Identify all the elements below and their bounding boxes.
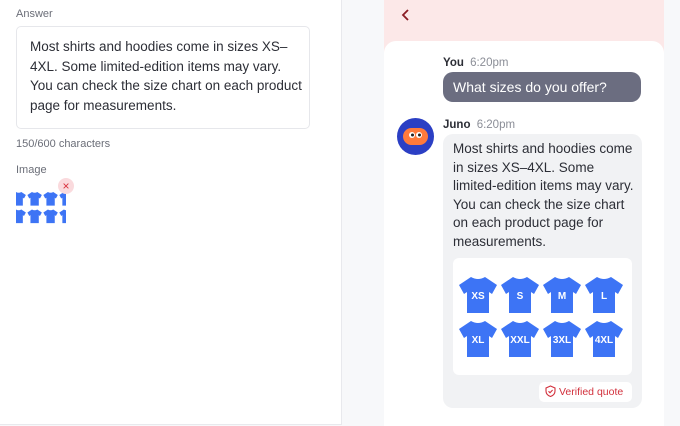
panel: answer editor [0,0,342,425]
text box: answer: Most shirts and hoodies come in sizes XS– [30,39,287,54]
text box: answer: You can check the size chart on each product [30,78,302,93]
bot message [443,119,642,408]
bot message: You can check the size chart [453,196,624,212]
size chart image: 4XL [595,335,613,346]
text box: answer: 4XL. Some limited-edition items may vary. [30,58,281,74]
user message [443,57,641,102]
panel: chat preview [384,0,664,426]
label: Answer: Answer [16,8,53,20]
bot message: measurements. [453,234,546,248]
character count: 150/600 characters [16,138,110,150]
label: Image: Image [16,164,47,176]
icon: Juno avatar [397,118,434,155]
user message: You 6:20pm [443,57,508,69]
size chart image: XS [471,291,485,302]
icon: back [402,9,409,21]
text box: answer [16,26,310,129]
size chart image: M [558,291,566,302]
size chart image: XL [472,335,484,346]
size chart image: S [517,291,524,302]
size chart image: XXL [510,335,530,346]
bot message: limited-edition items may vary. [453,178,634,193]
bot message: on each product page for [453,215,603,230]
image thumbnail [16,192,66,224]
badge: verified quote: Verified quote [559,386,623,398]
chat card [384,41,664,426]
text box: answer: page for measurements. [30,98,176,112]
bot message: Most shirts and hoodies come [453,141,632,156]
size chart image: 3XL [553,335,571,346]
bot message: in sizes XS–4XL. Some [453,160,594,174]
bot message: Juno 6:20pm [443,119,515,131]
badge: verified quote [539,382,632,402]
size chart image: L [601,291,607,302]
icon: remove [58,178,74,194]
size chart image [453,258,632,375]
icon: remove: × [62,179,70,193]
user message: What sizes do you offer? [453,79,607,95]
